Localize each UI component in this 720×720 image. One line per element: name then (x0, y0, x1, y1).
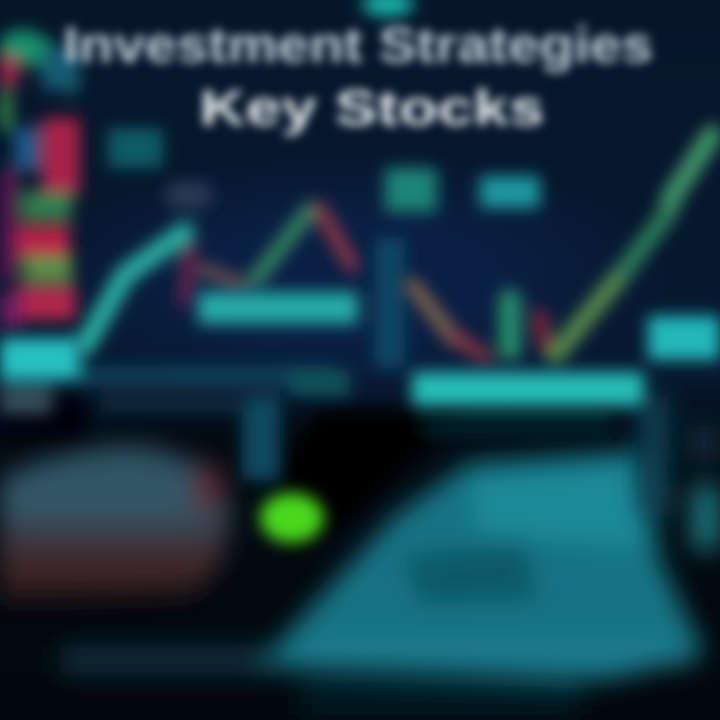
right side teal column (640, 395, 720, 550)
black central wedge (285, 410, 460, 560)
teal bars right (412, 316, 720, 436)
small teal box top-left (108, 128, 163, 168)
black band left (0, 398, 85, 436)
green glow (260, 493, 324, 543)
teal bars left (0, 238, 405, 480)
left line chart (85, 195, 352, 345)
teal lower panel (60, 450, 705, 715)
right line chart (412, 135, 712, 358)
title (63, 17, 653, 136)
left chart column (0, 30, 80, 328)
small legend tiles (385, 168, 540, 212)
top knob (362, 0, 414, 17)
title line two: Key Stocks (200, 80, 544, 136)
bottom left mound (0, 444, 229, 604)
title line one: Investment Strategies (63, 17, 653, 73)
candlestick stack (0, 30, 80, 328)
